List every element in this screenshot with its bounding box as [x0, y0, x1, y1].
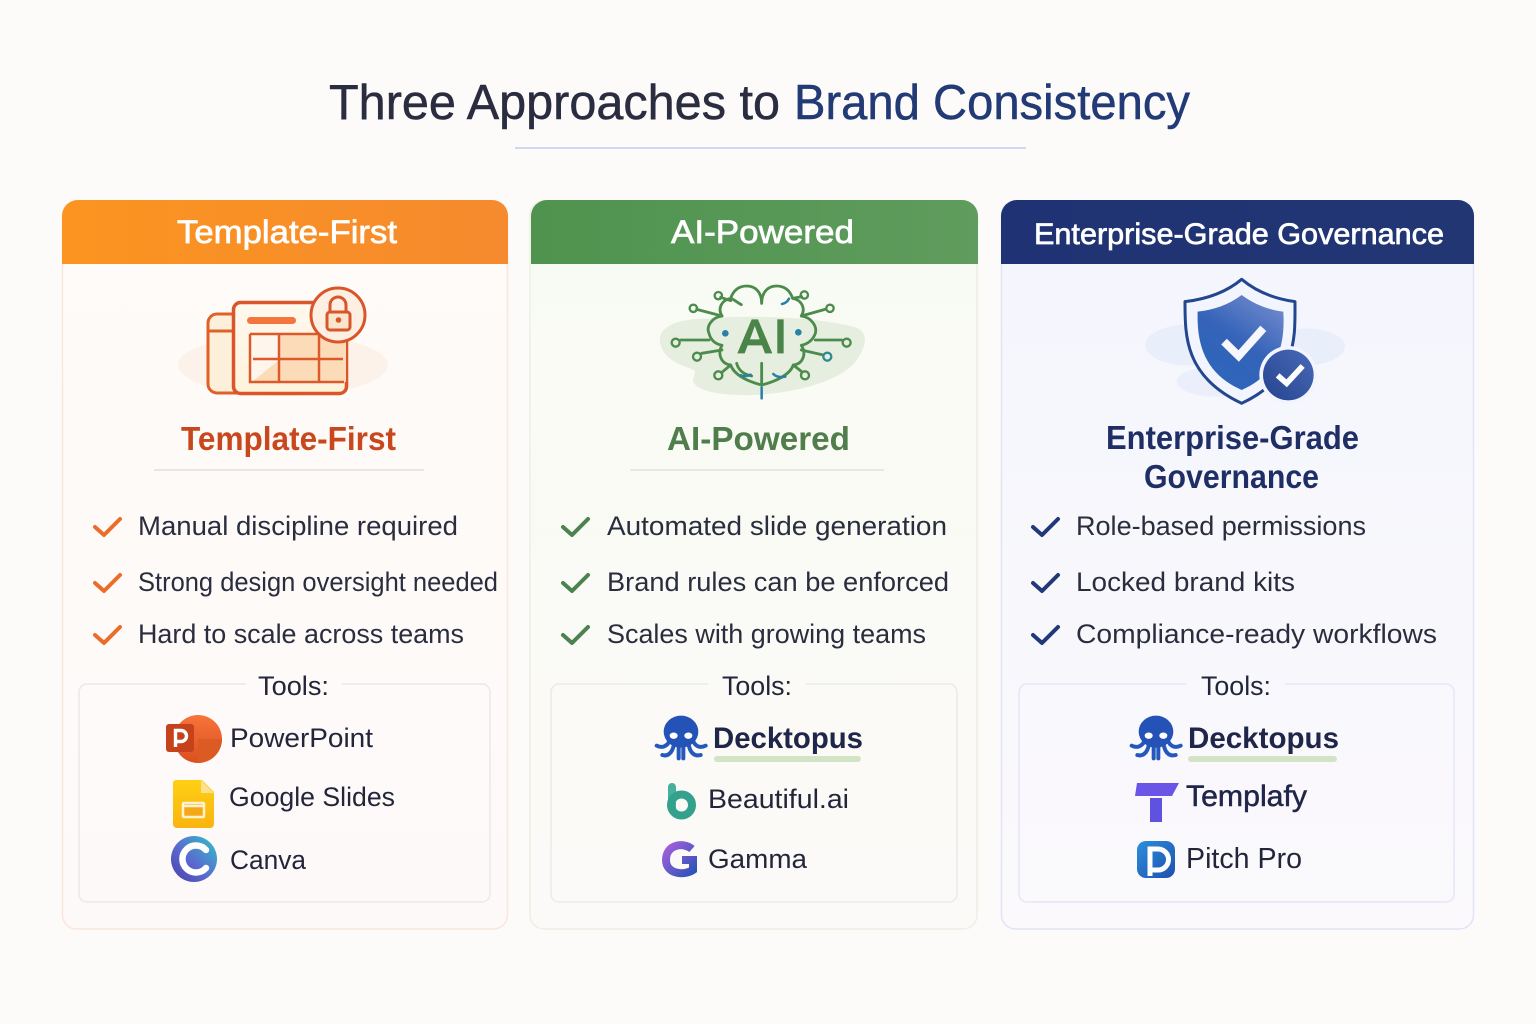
subheading: Template-First: Template-First: [181, 420, 396, 457]
bullet list: Locked brand kits: [1076, 567, 1295, 597]
icon: Decktopus: [657, 716, 706, 758]
icon: Decktopus: [1132, 716, 1181, 758]
tools box: Tools:: [1201, 671, 1271, 701]
tools box: Beautiful.ai: [708, 784, 849, 814]
icon: Templafy: [1135, 783, 1179, 822]
tools box: [1019, 671, 1454, 902]
tools box: [551, 671, 957, 902]
bullet list: Compliance-ready workflows: [1076, 619, 1437, 649]
subheading: Enterprise-Grade Governance: [1106, 419, 1359, 495]
icon: Google Slides: [173, 780, 214, 828]
icon: Beautiful.ai: [671, 787, 692, 816]
panel: AI-Powered: [530, 200, 978, 929]
subheading: Enterprise-Grade Governance: Governance: [1144, 458, 1319, 495]
bullet list: Brand rules can be enforced: [607, 567, 949, 597]
panel: Template-First: [62, 200, 508, 929]
icon: Canva: [171, 836, 217, 882]
icon: PowerPoint: [166, 715, 222, 763]
title: Three Approaches to: [329, 76, 780, 130]
tools box: Google Slides: [229, 782, 395, 812]
header: Template-First: [62, 200, 508, 264]
header: Enterprise-Grade Governance: [1001, 200, 1474, 264]
bullet list: Automated slide generation: [607, 511, 947, 541]
icon: locked template: [178, 288, 388, 396]
icon: Pitch Pro: [1137, 841, 1175, 878]
bullet list: Scales with growing teams: [607, 619, 926, 649]
bullet list: Hard to scale across teams: [138, 619, 464, 649]
header: AI-Powered: AI-Powered: [671, 214, 854, 250]
tools box: Tools:: [258, 671, 329, 701]
icon: Gamma: [666, 845, 693, 873]
title: Brand Consistency: [794, 76, 1190, 130]
bullet list: [563, 511, 949, 649]
bullet list: [95, 511, 498, 649]
subheading: Enterprise-Grade Governance: Enterprise-Grade: [1106, 419, 1359, 456]
icon: shield with check: [1145, 279, 1345, 404]
bullet list: Strong design oversight needed: [138, 567, 498, 597]
header: Template-First: Template-First: [177, 214, 397, 250]
header: Enterprise-Grade Governance: Enterprise-Grade Governance: [1034, 218, 1444, 251]
tools box: PowerPoint: [230, 723, 374, 753]
tools box: [79, 671, 490, 902]
tools box: Templafy: [1186, 780, 1307, 813]
header: AI-Powered: [531, 200, 978, 264]
bullet list: Role-based permissions: [1076, 511, 1366, 541]
icon: AI brain: [660, 286, 865, 398]
tools box: Canva: [230, 845, 307, 875]
panel: Enterprise-Grade Governance: [1001, 200, 1474, 929]
tools box: Tools:: [722, 671, 792, 701]
title: [329, 76, 1190, 130]
tools box: Decktopus: [713, 722, 863, 755]
subheading: AI-Powered: AI-Powered: [667, 420, 850, 457]
bullet list: Manual discipline required: [138, 511, 458, 541]
tools box: Pitch Pro: [1186, 843, 1302, 875]
tools box: Decktopus: [1188, 722, 1339, 755]
bullet list: [1033, 511, 1437, 649]
tools box: Gamma: [708, 844, 808, 874]
